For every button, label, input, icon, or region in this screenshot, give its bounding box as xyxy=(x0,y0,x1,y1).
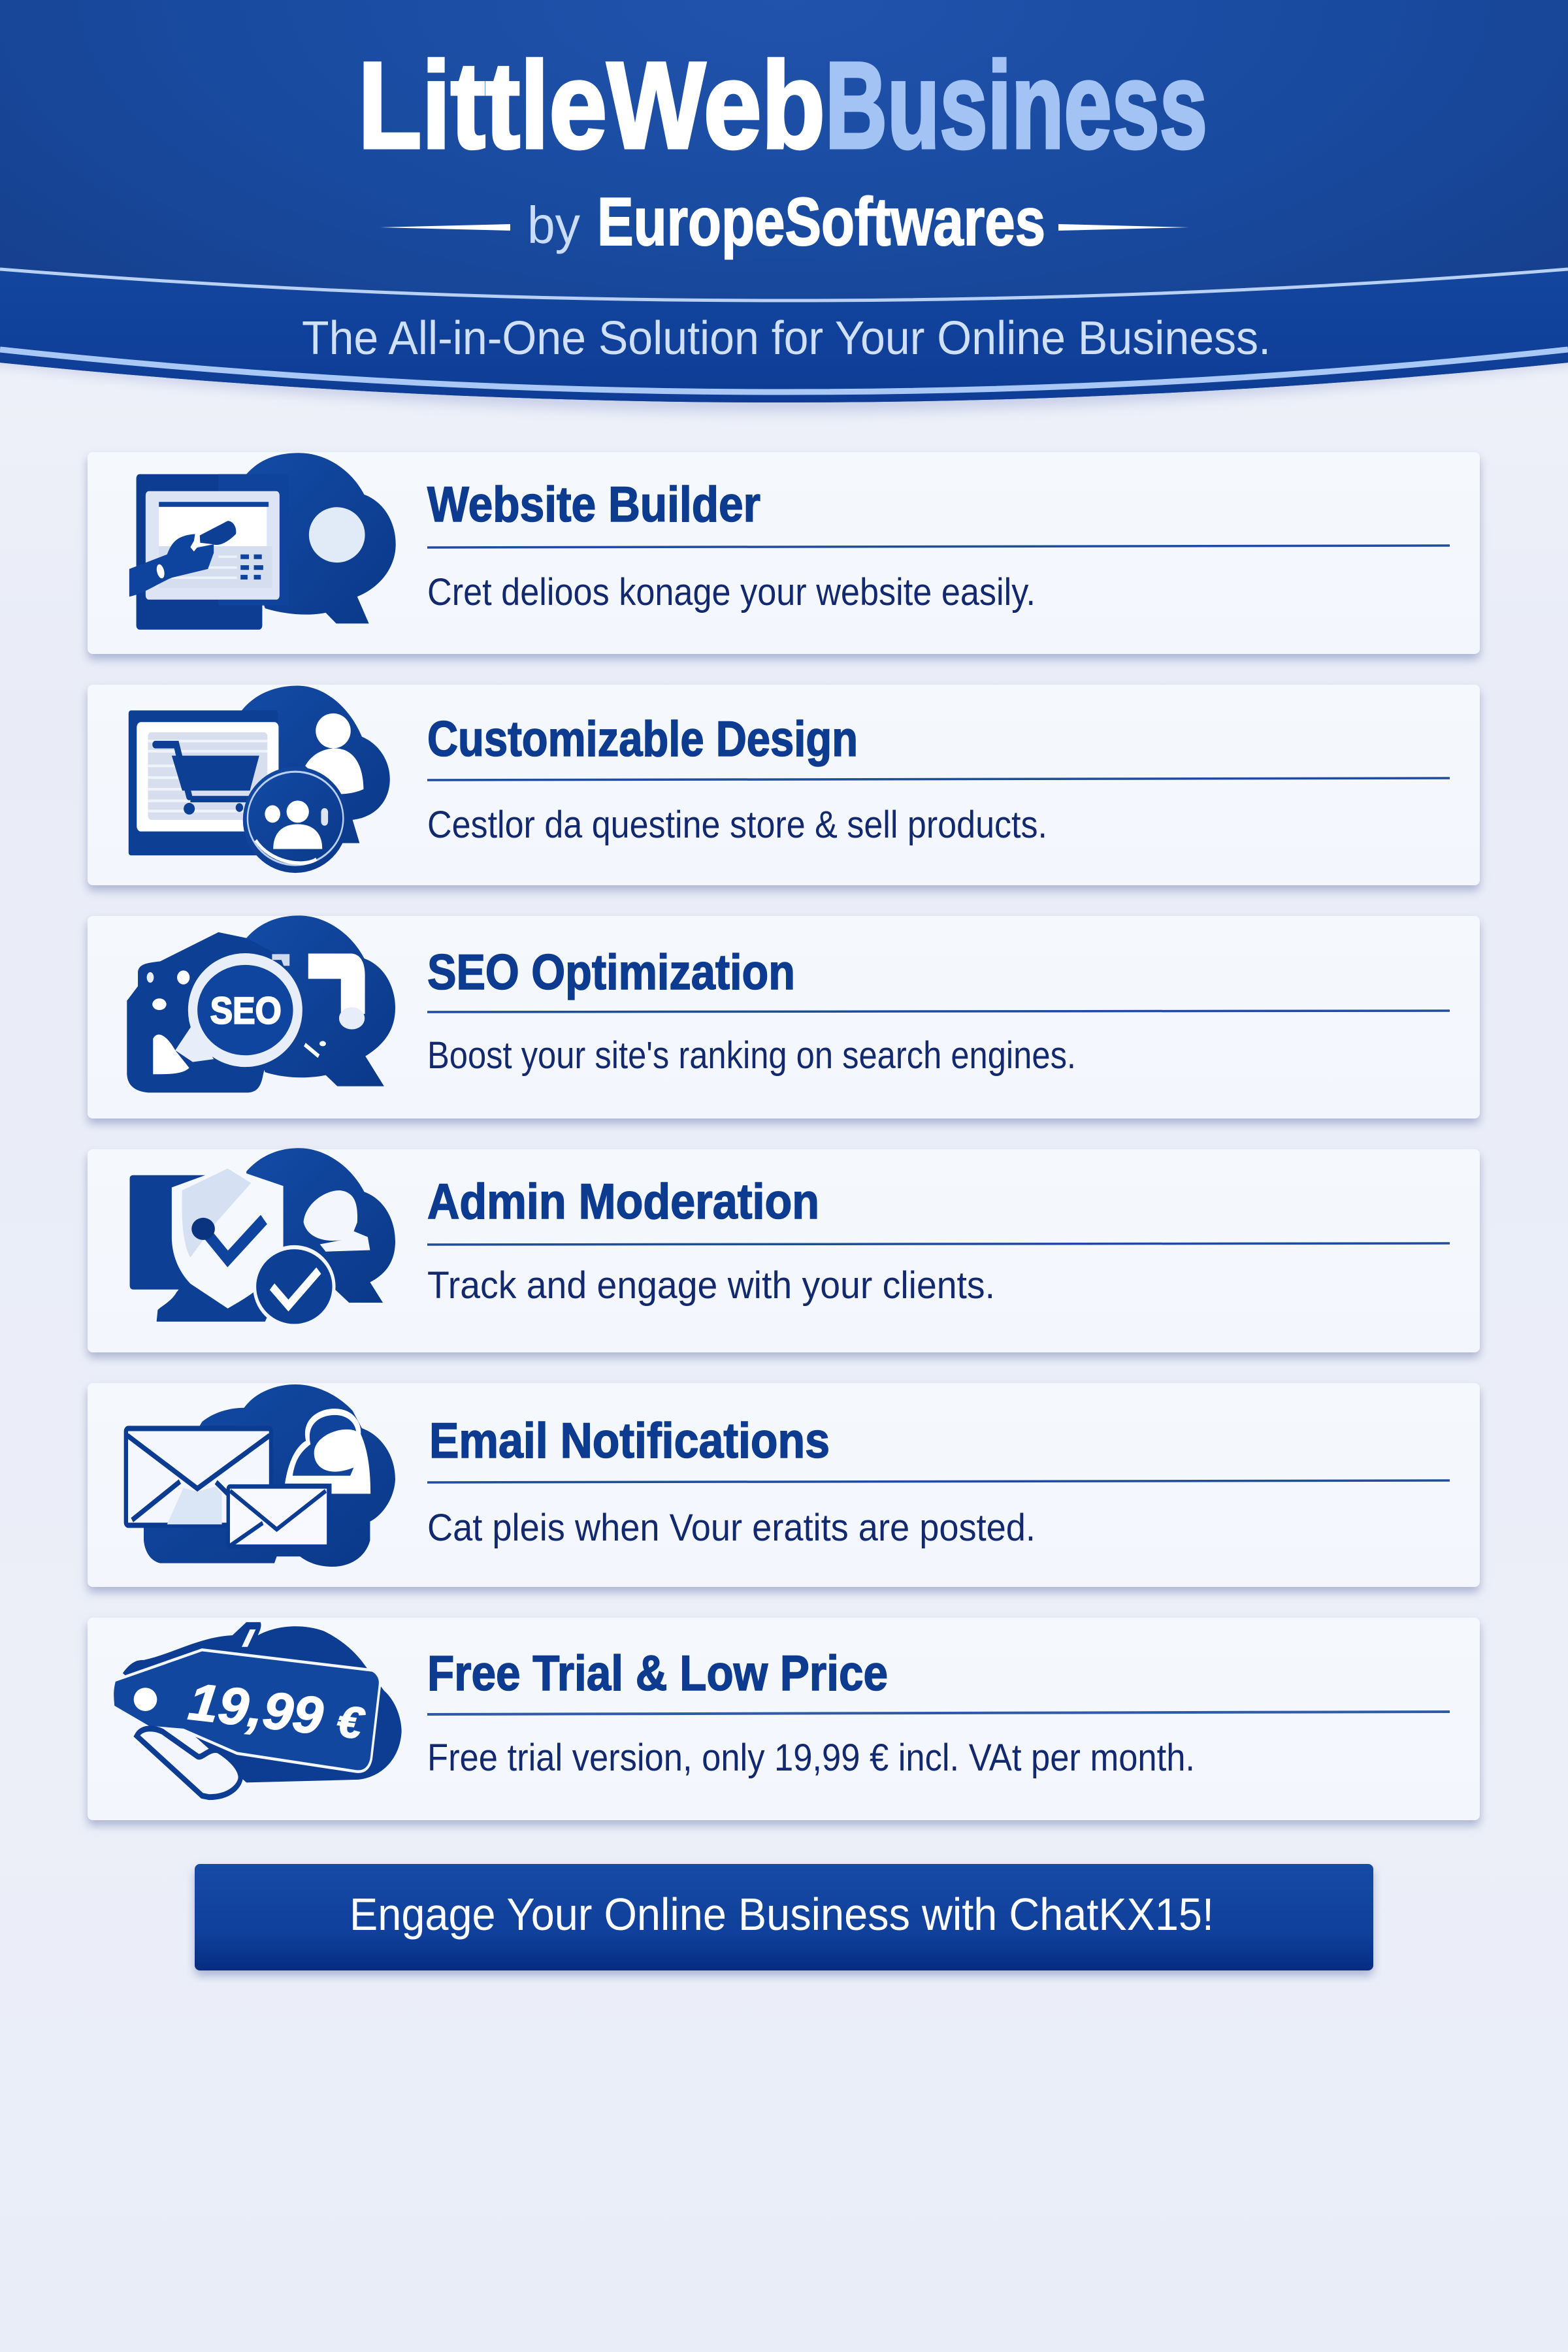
header banner xyxy=(0,0,1568,412)
title: LittleWeb xyxy=(358,37,825,174)
description: Cat pleis when Vour eratits are posted. xyxy=(427,1507,1036,1549)
panel: seo optimization xyxy=(88,915,1480,1124)
tagline: The All-in-One Solution for Your Online Business. xyxy=(302,312,1271,365)
heading: Website Builder xyxy=(427,477,760,532)
panel: customizable design xyxy=(88,685,1480,890)
description: Cestlor da questine store & sell products. xyxy=(427,804,1047,846)
title: Business xyxy=(825,37,1207,174)
description: Cret delioos konage your website easily. xyxy=(427,571,1036,613)
header curve: upper line xyxy=(0,269,1568,301)
subtitle: by EuropeSoftwares: by xyxy=(527,196,580,254)
button label: Engage Your Online Business with ChatKX15! xyxy=(350,1889,1214,1940)
heading: SEO Optimization xyxy=(427,945,795,1000)
description: Track and engage with your clients. xyxy=(427,1264,995,1307)
icon text: SEO: SEO xyxy=(210,990,282,1032)
panel: free trial and low price xyxy=(88,1618,1480,1825)
price text: 19,99 € xyxy=(186,1672,368,1750)
description: Boost your site's ranking on search engines. xyxy=(427,1034,1076,1077)
heading: Customizable Design xyxy=(427,711,858,767)
header curve: lower line xyxy=(0,350,1568,392)
heading: Free Trial & Low Price xyxy=(427,1646,888,1701)
icon: price tag with hand xyxy=(112,1622,402,1797)
heading: Admin Moderation xyxy=(427,1174,819,1230)
icon: shield with check marks xyxy=(130,1148,395,1326)
icon: seo magnifier xyxy=(127,915,395,1092)
panel: admin moderation xyxy=(88,1148,1480,1358)
subtitle: by EuropeSoftwares xyxy=(380,184,1189,260)
description: Free trial version, only 19,99 € incl. VAt per month. xyxy=(427,1737,1195,1779)
icon: envelopes and user xyxy=(126,1384,395,1567)
panel: website builder xyxy=(88,452,1480,659)
heading: Email Notifications xyxy=(429,1413,830,1469)
icon: monitor with hand and speech bubble xyxy=(129,453,396,630)
icon: shopping cart and users xyxy=(129,685,390,873)
title xyxy=(358,37,1207,174)
call-to-action button xyxy=(195,1864,1373,1976)
panel: email notifications xyxy=(88,1383,1480,1592)
subtitle: by EuropeSoftwares: EuropeSoftwares xyxy=(597,184,1045,260)
